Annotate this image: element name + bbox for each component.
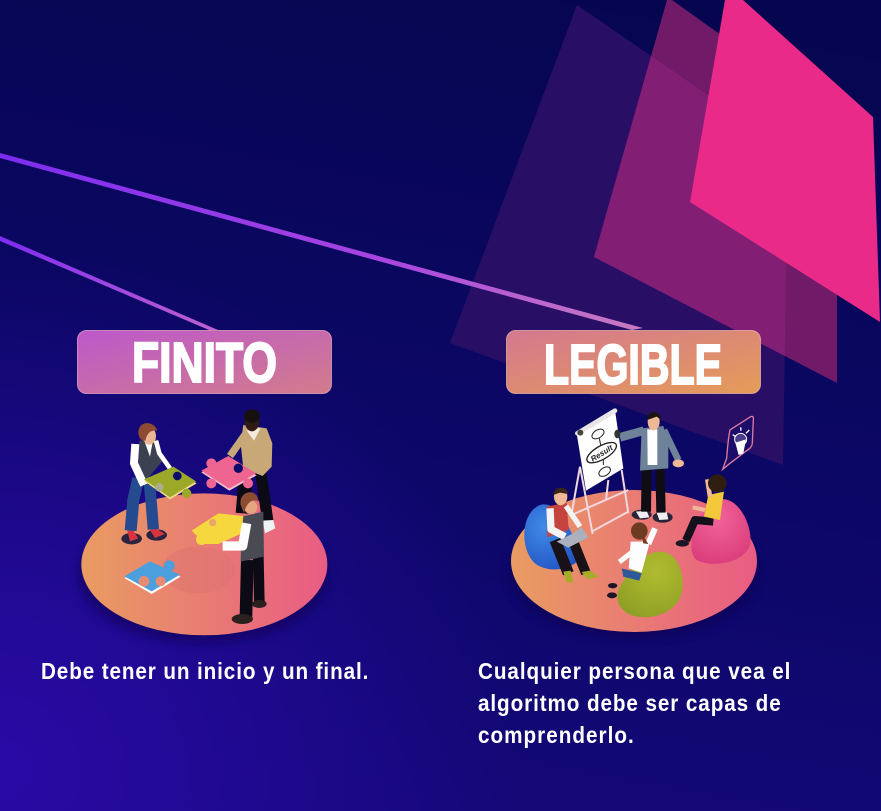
green bean bag xyxy=(617,552,683,617)
light bulb xyxy=(733,427,749,455)
platform shadow xyxy=(509,505,759,638)
person: presenter in grey jacket xyxy=(614,412,684,523)
caption: LEGIBLE: Cualquier persona que vea el xyxy=(478,658,790,684)
green puzzle piece xyxy=(144,467,197,499)
man's arm and head xyxy=(223,492,258,546)
tag: LEGIBLE: LEGIBLE xyxy=(544,333,722,397)
caption: LEGIBLE: algoritmo debe ser capas de xyxy=(478,690,781,716)
dark violet parallelogram xyxy=(450,5,788,465)
platform disc xyxy=(81,493,327,635)
person: woman in yellow top xyxy=(676,474,727,547)
blue puzzle piece xyxy=(124,560,181,594)
pink puzzle piece xyxy=(201,456,257,491)
platform disc xyxy=(511,490,757,632)
person: woman with green puzzle xyxy=(121,423,170,544)
illustration: team assembling puzzle xyxy=(78,409,328,643)
caption: FINITO: Debe tener un inicio y un final. xyxy=(41,658,368,684)
caption: LEGIBLE xyxy=(478,658,790,748)
person: man in beige sweater xyxy=(230,409,275,533)
purple parallelogram xyxy=(594,0,837,383)
connector line to LEGIBLE xyxy=(0,153,643,330)
tag: FINITO: FINITO xyxy=(132,331,277,395)
connector line to FINITO xyxy=(0,236,218,330)
yellow puzzle piece xyxy=(192,513,243,545)
flipchart text: Result xyxy=(589,443,615,464)
platform shadow xyxy=(78,507,328,643)
caption: LEGIBLE: comprenderlo. xyxy=(478,722,634,748)
pink parallelogram xyxy=(690,0,880,322)
floor puzzle shadow xyxy=(162,547,235,593)
flipchart xyxy=(572,410,628,534)
decorative layered parallelograms xyxy=(450,0,880,465)
blue bean bag xyxy=(524,504,580,569)
pink bean bag xyxy=(691,499,751,564)
person: woman in white top xyxy=(607,522,655,598)
person: man with laptop xyxy=(547,488,599,583)
person: man with yellow puzzle xyxy=(232,512,267,624)
speech bubble with light bulb xyxy=(723,416,753,469)
purple overlap tone xyxy=(594,56,786,356)
illustration: group discussion around flipchart xyxy=(509,410,759,638)
